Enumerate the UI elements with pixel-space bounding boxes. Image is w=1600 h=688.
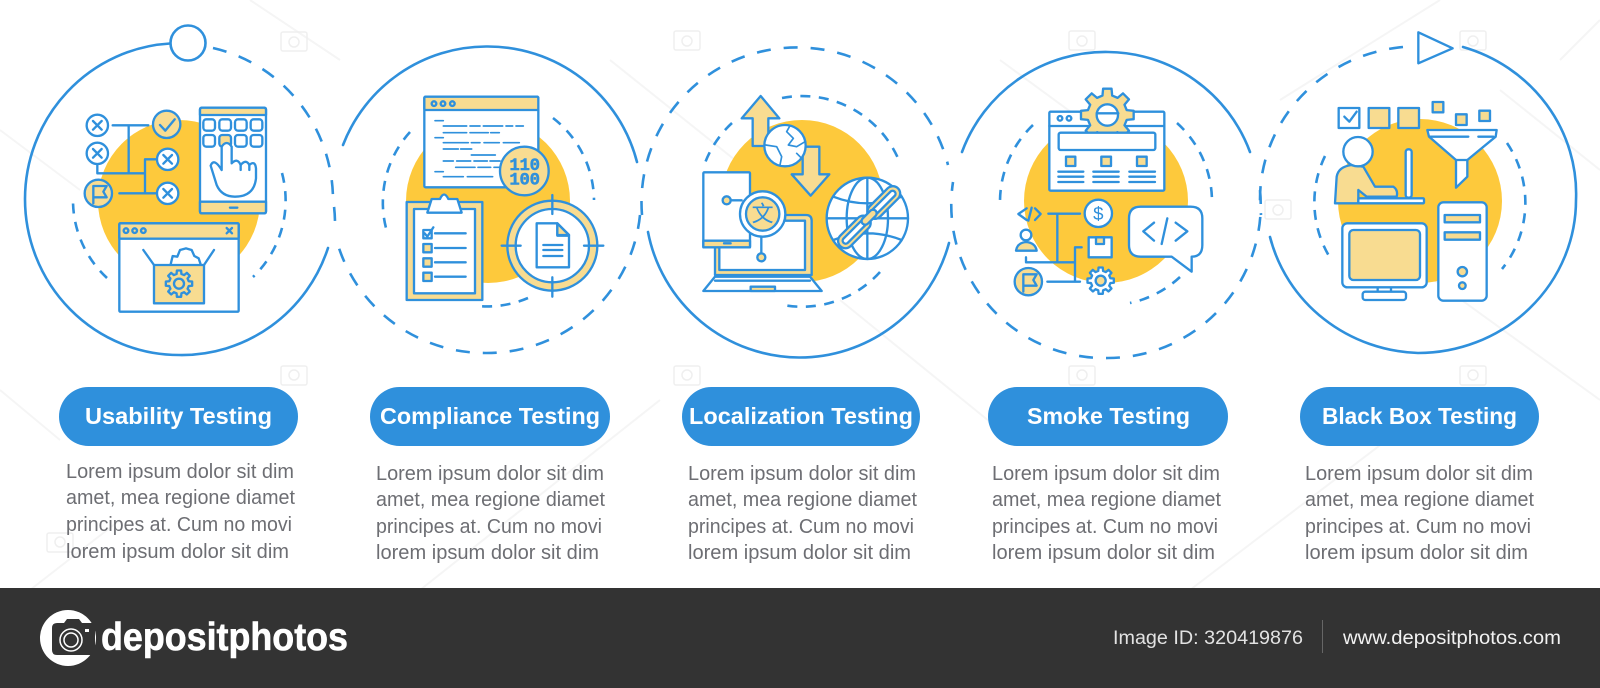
pill: black box testing: Black Box Testing <box>1322 403 1517 429</box>
panel: localization testing <box>641 47 949 564</box>
text block 1: amet, mea regione diamet <box>66 487 295 509</box>
site url: www.depositphotos.com <box>1342 628 1561 649</box>
yellow disc 2 <box>406 119 570 283</box>
logo icon <box>40 610 96 666</box>
pill: compliance testing <box>370 387 610 446</box>
outer ring 5 <box>1260 47 1576 353</box>
text block 4: lorem ipsum dolor sit dim <box>992 542 1215 564</box>
panel: compliance testing <box>338 46 640 564</box>
text block 2: principes at. Cum no movi <box>376 516 602 538</box>
pill: usability testing <box>59 387 298 446</box>
text block 5: lorem ipsum dolor sit dim <box>1305 542 1528 564</box>
icon: black box <box>1335 32 1497 301</box>
text block 1: Lorem ipsum dolor sit dim <box>66 461 294 483</box>
pill: smoke testing <box>988 387 1228 446</box>
outer ring 3 <box>641 47 949 358</box>
panel: smoke testing <box>951 52 1261 564</box>
image id: Image ID: 320419876 <box>1113 628 1303 649</box>
icon: localization <box>703 96 908 291</box>
watermark camera icons <box>47 31 1486 552</box>
pill: localization testing: Localization Testing <box>689 403 913 429</box>
logo wordmark: depositphotos <box>101 616 348 659</box>
text block 5: Lorem ipsum dolor sit dim <box>1305 463 1533 485</box>
icon: smoke test: $ <box>1093 203 1104 224</box>
pill: compliance testing: Compliance Testing <box>380 403 600 429</box>
icon: compliance: 110 <box>509 157 540 176</box>
inner dashed ring 2 <box>383 118 594 306</box>
text block 1 <box>66 461 295 563</box>
text block 4: Lorem ipsum dolor sit dim <box>992 463 1220 485</box>
yellow disc 3 <box>721 120 883 282</box>
text block 5: principes at. Cum no movi <box>1305 516 1531 538</box>
text block 3: principes at. Cum no movi <box>688 516 914 538</box>
text block 4: principes at. Cum no movi <box>992 516 1218 538</box>
text block 1: principes at. Cum no movi <box>66 514 292 536</box>
text block 2: Lorem ipsum dolor sit dim <box>376 463 604 485</box>
inner dashed ring 4 <box>1000 123 1212 303</box>
icon: usability tests <box>85 108 266 312</box>
icon: localization: 文 <box>752 202 774 227</box>
icon: compliance <box>407 97 603 300</box>
text block 2 <box>376 463 605 564</box>
pill: smoke testing: Smoke Testing <box>1027 403 1190 429</box>
outer ring 2 <box>338 46 640 353</box>
panel: black box testing <box>1260 32 1576 564</box>
text block 4: amet, mea regione diamet <box>992 489 1221 511</box>
footer bar <box>0 588 1600 688</box>
text block 3: amet, mea regione diamet <box>688 489 917 511</box>
text block 5: amet, mea regione diamet <box>1305 489 1534 511</box>
text block 3: lorem ipsum dolor sit dim <box>688 542 911 564</box>
inner dashed ring 1 <box>73 173 286 278</box>
text block 2: amet, mea regione diamet <box>376 489 605 511</box>
pill: localization testing <box>682 387 920 446</box>
text block 3 <box>688 463 917 564</box>
icon: compliance: 100 <box>509 172 540 191</box>
pill: usability testing: Usability Testing <box>85 403 272 429</box>
icon: smoke test <box>1015 89 1202 295</box>
text block 3: Lorem ipsum dolor sit dim <box>688 463 916 485</box>
text block 4 <box>992 463 1221 564</box>
text block 5 <box>1305 463 1534 564</box>
inner dashed ring 3 <box>705 96 900 307</box>
yellow disc 1 <box>98 120 260 282</box>
pill: black box testing <box>1300 387 1539 446</box>
yellow disc 5 <box>1338 119 1502 283</box>
outer ring 4 <box>951 52 1261 358</box>
outer ring 1 <box>25 26 335 355</box>
yellow disc 4 <box>1024 119 1188 283</box>
panel: usability testing <box>25 26 335 563</box>
text block 2: lorem ipsum dolor sit dim <box>376 542 599 564</box>
text block 1: lorem ipsum dolor sit dim <box>66 541 289 563</box>
inner dashed ring 5 <box>1314 143 1525 269</box>
